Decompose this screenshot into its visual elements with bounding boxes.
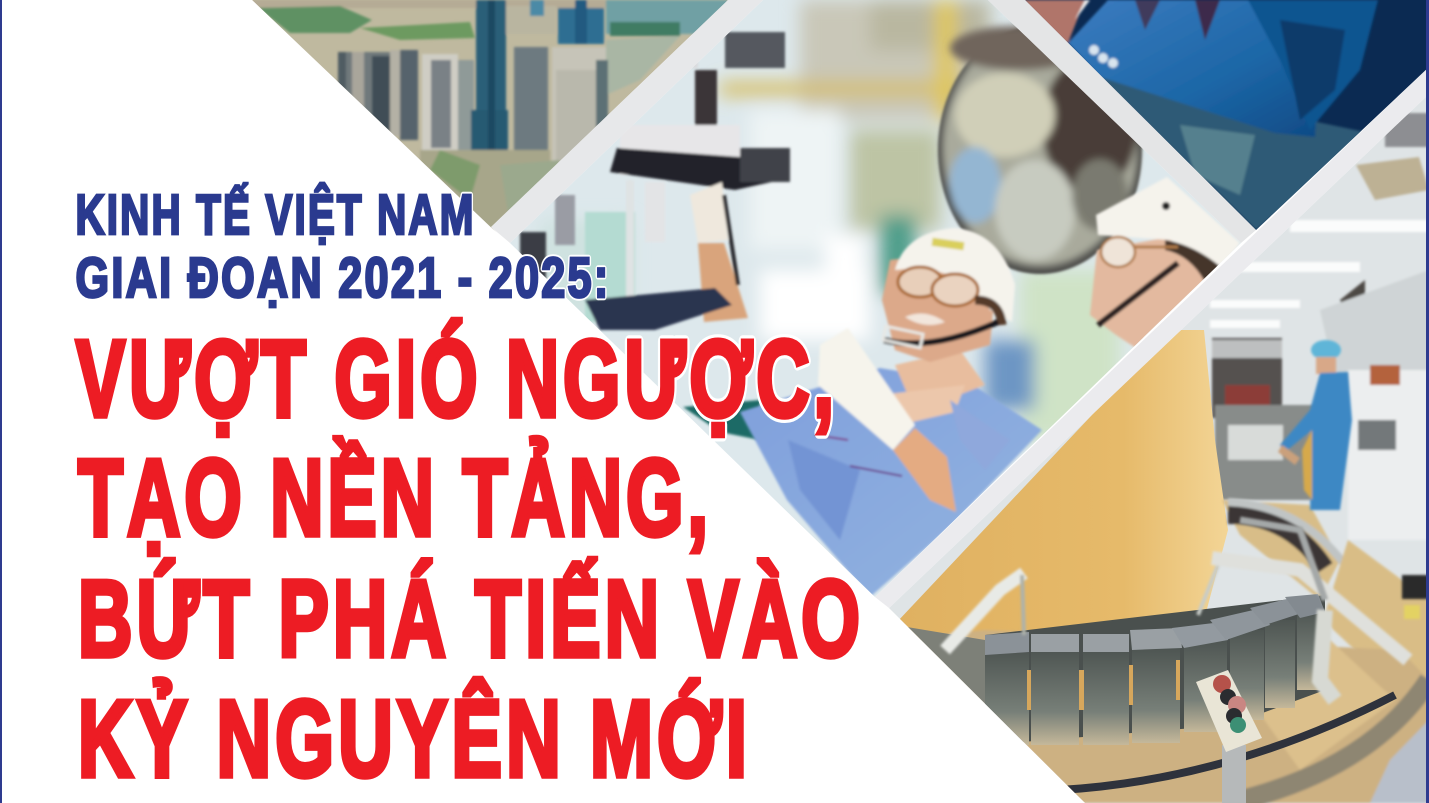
white machine frame	[945, 520, 1429, 700]
ceiling and equipment	[1210, 113, 1429, 540]
yellow yarn cone	[880, 330, 1228, 640]
right border	[1426, 0, 1429, 803]
rail and control box	[1060, 670, 1395, 803]
white diagonal strip: city / workers	[491, 0, 763, 243]
left border	[0, 0, 2, 803]
worker 2 head	[1090, 177, 1240, 352]
blurred factory background	[540, 0, 1120, 440]
headline: Vượt gió ngược, tạo nền tảng, bứt phá tiến vào kỷ nguyên mới: TẠO NỀN TẢNG,	[78, 437, 712, 559]
photo: city skyline	[250, 0, 730, 240]
worker 1 shirt	[740, 328, 1042, 597]
headline: Vượt gió ngược, tạo nền tảng, bứt phá tiến vào kỷ nguyên mới: VƯỢT GIÓ NGƯỢC,	[76, 318, 838, 440]
heading: Kinh tế Việt Nam giai đoạn 2021 - 2025: GIAI ĐOẠN 2021 - 2025:	[76, 246, 610, 310]
headline: Vượt gió ngược, tạo nền tảng, bứt phá tiến vào kỷ nguyên mới: TẠO NỀN TẢNG,	[78, 437, 712, 559]
heading: Kinh tế Việt Nam giai đoạn 2021 - 2025: GIAI ĐOẠN 2021 - 2025:	[76, 246, 610, 310]
machine arm	[520, 28, 790, 440]
headline: Vượt gió ngược, tạo nền tảng, bứt phá tiến vào kỷ nguyên mới: BỨT PHÁ TIẾN VÀO	[78, 558, 864, 680]
worker 1 head	[882, 228, 1015, 362]
heading: Kinh tế Việt Nam giai đoạn 2021 - 2025: KINH TẾ VIỆT NAM	[76, 182, 476, 247]
floor of yarn	[880, 630, 1429, 803]
photo: workers in factory	[500, 0, 1260, 600]
headline: Vượt gió ngược, tạo nền tảng, bứt phá tiến vào kỷ nguyên mới	[76, 318, 864, 800]
headline: Vượt gió ngược, tạo nền tảng, bứt phá tiến vào kỷ nguyên mới: KỶ NGUYÊN MỚI	[78, 677, 751, 800]
white triangle panel	[0, 0, 1085, 803]
photo: blue suit sleeve	[1010, 0, 1429, 240]
fan	[938, 26, 1142, 274]
back ring of machine	[1222, 497, 1426, 679]
heading: Kinh tế Việt Nam giai đoạn 2021 - 2025	[76, 182, 610, 310]
white diagonal strip: workers / suit	[988, 0, 1256, 243]
headline: Vượt gió ngược, tạo nền tảng, bứt phá tiến vào kỷ nguyên mới: BỨT PHÁ TIẾN VÀO	[78, 558, 864, 680]
worker in blue	[1278, 340, 1352, 510]
row of black panels	[895, 594, 1325, 745]
photo: textile machine	[880, 90, 1429, 803]
headline: Vượt gió ngược, tạo nền tảng, bứt phá tiến vào kỷ nguyên mới: VƯỢT GIÓ NGƯỢC,	[76, 318, 838, 440]
heading: Kinh tế Việt Nam giai đoạn 2021 - 2025: KINH TẾ VIỆT NAM	[76, 182, 476, 247]
white diagonal strip: workers / machine	[875, 67, 1429, 608]
